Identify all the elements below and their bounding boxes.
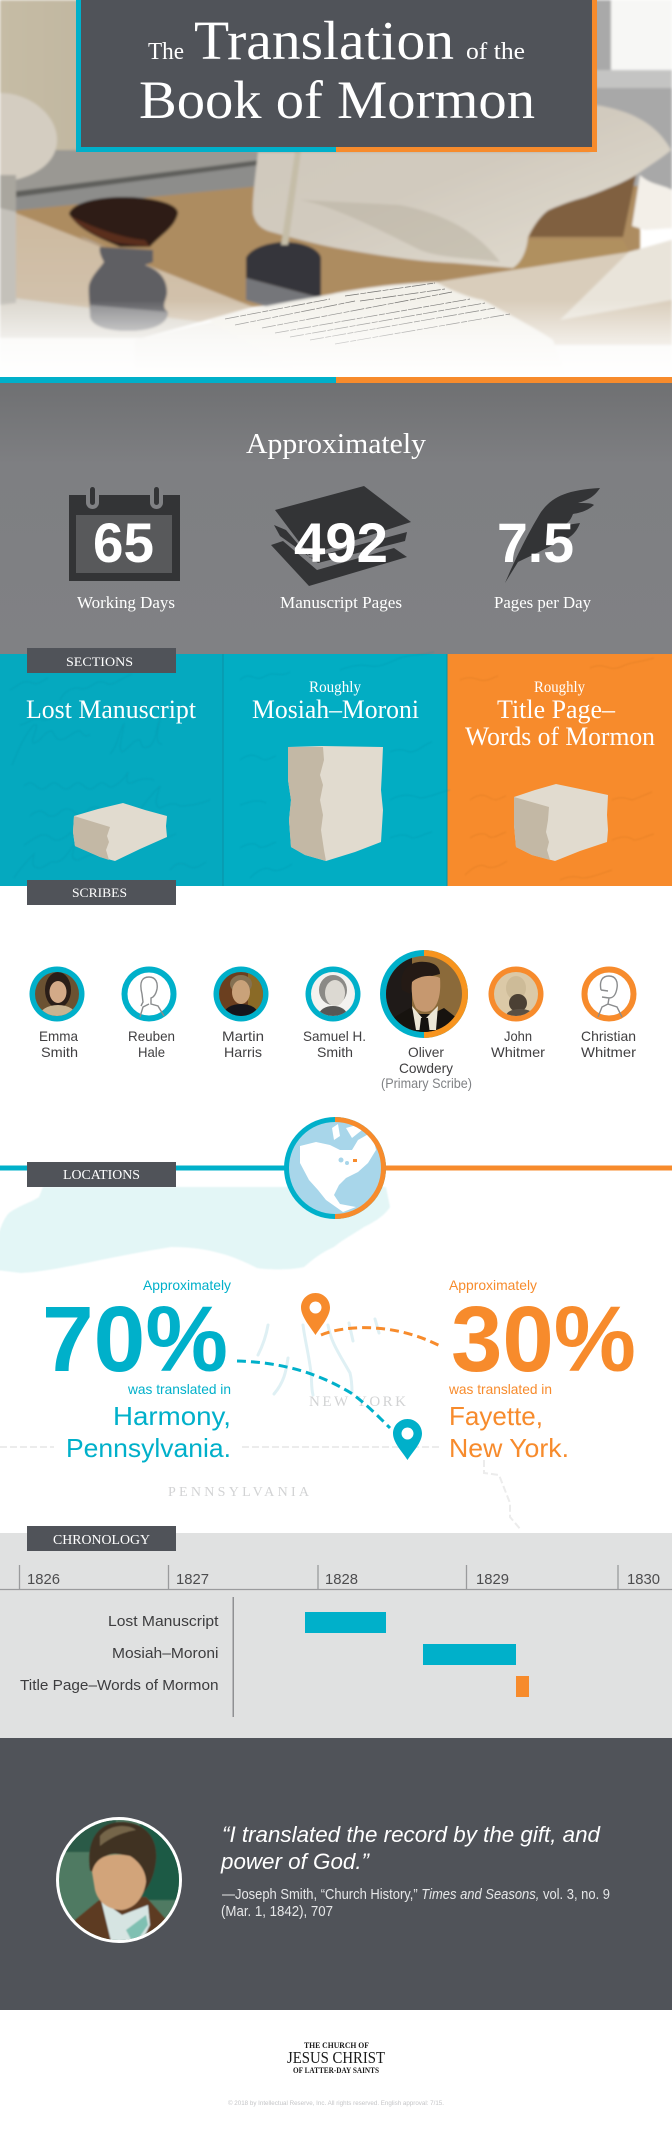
stat: 65 working days (77, 511, 175, 612)
name (39, 1028, 78, 1060)
name: Whitmer (491, 1044, 545, 1060)
title line one: Translation (194, 10, 454, 71)
route: dashed line from 70% to Harmony pin (237, 1361, 390, 1428)
stat: 70 percent in Harmony, Pennsylvania: Harmony, (113, 1401, 231, 1431)
heading tab: LOCATIONS: LOCATIONS (63, 1167, 140, 1182)
quote text: “I translated the record by the gift, and (222, 1822, 601, 1847)
name: Whitmer (581, 1044, 636, 1060)
scribe: Oliver Cowdery, primary scribe (380, 950, 472, 1091)
quote citation: (Mar. 1, 1842), 707 (221, 1904, 333, 1920)
label: New York: NEW YORK (309, 1394, 409, 1410)
stat: 492 manuscript pages (280, 511, 402, 612)
heading tab: CHRONOLOGY: CHRONOLOGY (53, 1532, 150, 1547)
label: Pennsylvania: PENNSYLVANIA (168, 1485, 312, 1500)
heading tab: SCRIBES (27, 880, 176, 905)
row: Title Page–Words of Mormon: Title Page–Words of Mormon (20, 1678, 219, 1694)
icon: globe showing North America (284, 1117, 386, 1219)
heading: Approximately: Approximately (246, 429, 426, 460)
timeline axis and years (0, 1565, 672, 1590)
stat: 70 percent in Harmony, Pennsylvania: 70% (42, 1287, 228, 1391)
stat: 30 percent in Fayette, New York: Approximately (449, 1277, 537, 1293)
name (581, 1028, 636, 1060)
scribe: Reuben Hale (124, 970, 175, 1060)
name: Smith (317, 1044, 353, 1060)
quote text (220, 1822, 601, 1874)
timeline axis and years: 1829 (476, 1571, 509, 1588)
heading tab: SCRIBES: SCRIBES (72, 886, 127, 900)
timeline axis and years: 1830 (627, 1571, 660, 1588)
title panel (76, 0, 597, 152)
section: Mosiah–Moroni (252, 679, 419, 861)
stat: 30 percent in Fayette, New York: 30% (451, 1287, 636, 1391)
title line one: The (148, 39, 184, 65)
section: Title Page–Words of Mormon: Words of Mormon (465, 722, 655, 751)
stat: 70 percent in Harmony, Pennsylvania: Approximately (143, 1277, 231, 1293)
stat: 7.5 pages per day (494, 511, 592, 612)
panel: approximate totals (0, 383, 672, 654)
icon: calendar (69, 487, 180, 581)
hero photo: desk with quill, manuscript and covered box (0, 0, 672, 378)
row: Lost Manuscript (108, 1612, 386, 1633)
section: Mosiah–Moroni: Roughly (309, 679, 361, 696)
section: Lost Manuscript: Lost Manuscript (26, 695, 197, 724)
panel: sections (0, 652, 672, 886)
section: Mosiah–Moroni: Mosiah–Moroni (252, 695, 419, 724)
stat: 7.5 pages per day: 7.5 (497, 511, 574, 574)
panel: chronology (0, 1533, 672, 1738)
scribe: Samuel H. Smith (303, 966, 366, 1060)
icon: medium manuscript stack (514, 784, 608, 861)
stat: 7.5 pages per day: Pages per Day (494, 593, 592, 612)
title line one: of the (466, 39, 525, 65)
scribe: Christian Whitmer (581, 970, 636, 1060)
row: Mosiah–Moroni (112, 1644, 516, 1665)
icon: orange map pin, Fayette (301, 1293, 330, 1335)
stat: 30 percent in Fayette, New York: New York. (449, 1433, 569, 1463)
logo: The Church of Jesus Christ of Latter-day Saints: OF LATTER-DAY SAINTS (293, 2065, 379, 2075)
name (128, 1028, 175, 1060)
name: Emma (39, 1028, 78, 1044)
panel: quote (0, 1738, 672, 2010)
section: Title Page–Words of Mormon: Title Page– (497, 695, 616, 724)
name: Reuben (128, 1028, 175, 1044)
timeline axis and years: 1828 (325, 1571, 358, 1588)
quote citation (221, 1887, 610, 1920)
heading tab: CHRONOLOGY (27, 1526, 176, 1551)
row: Title Page–Words of Mormon (20, 1676, 529, 1697)
copyright notice: © 2018 by Intellectual Reserve, Inc. All rights reserved. English approval: 7/15. (228, 2099, 444, 2107)
section: Lost Manuscript (26, 695, 197, 861)
logo: The Church of Jesus Christ of Latter-day Saints: THE CHURCH OF (304, 2040, 369, 2050)
name: Cowdery (399, 1060, 453, 1076)
icon: teal map pin, Harmony (393, 1419, 422, 1460)
heading tab: LOCATIONS (27, 1162, 176, 1187)
name (222, 1028, 264, 1060)
name (303, 1028, 366, 1060)
name: John (504, 1028, 532, 1044)
name (491, 1028, 545, 1060)
row: Mosiah–Moroni: Mosiah–Moroni (112, 1646, 218, 1662)
icon: quill (505, 488, 600, 583)
title line one (148, 10, 525, 71)
quote citation: —Joseph Smith, “Church History,” Times and Seasons, vol. 3, no. 9 (222, 1887, 610, 1903)
heading tab: SECTIONS: SECTIONS (66, 655, 133, 669)
stat: 65 working days: 65 (93, 511, 154, 574)
section: Title Page–Words of Mormon: Roughly (534, 679, 585, 696)
logo: The Church of Jesus Christ of Latter-day Saints: JESUS CHRIST (287, 2048, 386, 2067)
quote text: power of God.” (220, 1849, 371, 1874)
scribe: John Whitmer (488, 966, 545, 1060)
two-colour divider stripe (0, 377, 672, 383)
stat: 492 manuscript pages: Manuscript Pages (280, 593, 402, 612)
stat: 65 working days: Working Days (77, 593, 175, 612)
name (381, 1044, 472, 1091)
stat: 70 percent in Harmony, Pennsylvania: Pennsylvania. (66, 1433, 231, 1463)
route: dashed line from Fayette pin to 30% (321, 1328, 442, 1347)
heading tab: SECTIONS (27, 648, 176, 673)
name: Smith (41, 1044, 78, 1060)
stat: 70 percent in Harmony, Pennsylvania: was translated in (127, 1381, 231, 1397)
map background: Lake Ontario, borders and finger lakes (0, 1187, 521, 1530)
name: (Primary Scribe) (381, 1075, 472, 1091)
stat: 70 percent in Harmony, Pennsylvania (42, 1277, 231, 1463)
timeline axis and years: 1826 (27, 1571, 60, 1588)
scribe: Martin Harris (214, 966, 268, 1060)
stat: 30 percent in Fayette, New York (448, 1277, 636, 1463)
stat: 30 percent in Fayette, New York: was translated in (448, 1381, 552, 1397)
name: Oliver (408, 1044, 444, 1060)
icon: tall manuscript stack (288, 746, 383, 861)
section: Title Page–Words of Mormon (465, 679, 655, 861)
name: Martin (222, 1028, 264, 1044)
timeline axis and years: 1827 (176, 1571, 209, 1588)
stat: 30 percent in Fayette, New York: Fayette, (449, 1401, 543, 1431)
title line two: Book of Mormon (139, 70, 535, 130)
row: Lost Manuscript: Lost Manuscript (108, 1614, 218, 1630)
stat: 492 manuscript pages: 492 (294, 511, 388, 574)
name: Harris (224, 1044, 262, 1060)
icon: stack of manuscript pages (271, 486, 411, 586)
portrait: Joseph Smith (56, 1817, 185, 1945)
logo: The Church of Jesus Christ of Latter-day Saints (287, 2040, 386, 2075)
icon: small manuscript stack (73, 803, 167, 861)
name: Hale (138, 1044, 165, 1060)
scribe: Emma Smith (30, 966, 84, 1060)
name: Samuel H. (303, 1028, 366, 1044)
location divider line (0, 1166, 672, 1170)
name: Christian (581, 1028, 636, 1044)
